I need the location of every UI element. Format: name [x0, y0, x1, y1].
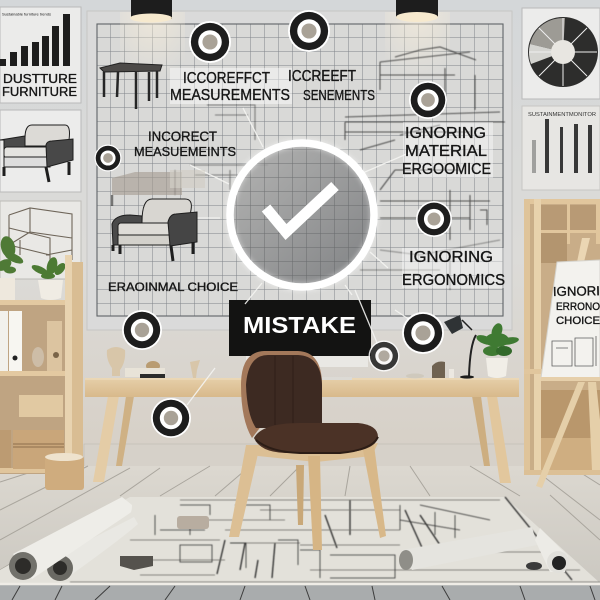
- armchair sketch faded: [112, 170, 205, 206]
- central check badge: [230, 143, 374, 287]
- wall background: [0, 0, 600, 470]
- chair: seat cushion: [254, 423, 378, 453]
- label: ergonomical choice: ERAOINMAL CHOICE: [108, 280, 238, 294]
- light: left pendant: [130, 0, 172, 22]
- poster: armchair: [0, 110, 81, 192]
- badge: ignoring ergonomics: [416, 201, 452, 237]
- floor: [0, 466, 600, 600]
- poster: bar chart with furniture title: FURNITURE: [2, 84, 77, 99]
- label: ignoring material: MATERIAL: [405, 143, 487, 160]
- ceiling lights: [130, 0, 438, 22]
- blueprint roll right: [399, 527, 569, 573]
- label: ignoring material: [402, 122, 493, 178]
- monitor: [229, 300, 371, 380]
- binders: [0, 311, 62, 371]
- label: incorrect measurements 2: SENEMENTS: [303, 87, 375, 104]
- board: ceiling light glow: [120, 12, 185, 102]
- poster header line: Sustainable furniture trends: [2, 12, 51, 16]
- badge: top center: [288, 10, 330, 52]
- blueprint rolls left: [9, 497, 138, 581]
- label: incorrect measurements 2: ICCREEFT: [288, 68, 356, 85]
- badge: ignoring material: [409, 81, 447, 119]
- desk objects right: [406, 362, 454, 378]
- poster: wireframe sofa: [0, 201, 81, 279]
- boxes: [0, 395, 64, 469]
- poster: bar chart right: [522, 106, 600, 190]
- chair: wooden frame: [246, 443, 378, 462]
- badge: below board left: [122, 310, 162, 350]
- label: ignoring ergonomics: IGNORING: [409, 249, 493, 266]
- wooden stool cylinder: [45, 453, 84, 490]
- main grid board: [87, 11, 512, 330]
- shelf: right with boxes: [524, 199, 600, 475]
- label: ignoring ergonomics: ERGONOMICS: [402, 272, 505, 289]
- leader lines: [187, 108, 416, 405]
- potted plant on desk: [475, 322, 519, 378]
- poster: bar chart with furniture title: [0, 7, 81, 103]
- chair: rear leg: [296, 465, 304, 525]
- easel with chart: CHOICE: [556, 315, 600, 327]
- board: architectural sketches: [175, 47, 505, 290]
- badge: below board right: [402, 312, 444, 354]
- label: incorrect measurements 1: MEASUREMENTS: [170, 87, 290, 104]
- label: incorrect measurements 3: INCORECT: [148, 128, 217, 144]
- light: right pendant: [396, 0, 438, 22]
- label: incorrect measurements 3: [134, 128, 236, 159]
- monitor label: MISTAKE: [243, 312, 356, 338]
- check mark: [266, 186, 335, 232]
- desk objects left: [107, 347, 200, 378]
- baseboard: [84, 444, 534, 468]
- label: incorrect measurements 2: [288, 68, 375, 104]
- desk: [85, 378, 519, 483]
- poster title: DUSTTURE: [3, 71, 77, 86]
- chair: [229, 351, 386, 550]
- badge: incorrect measurements small: [94, 144, 122, 172]
- poster: pie chart: [522, 8, 600, 99]
- poster header line: SUSTAINMENTMONITOR: [528, 112, 596, 118]
- label: incorrect measurements 1: ICCOREFFCT: [183, 70, 270, 87]
- easel drawing: [552, 336, 596, 366]
- badge: near monitor: [368, 340, 400, 372]
- label: incorrect measurements 3: MEASUEMEINTS: [134, 144, 236, 159]
- chair: backrest: [241, 351, 322, 438]
- label: ignoring material: IGNORING: [405, 125, 486, 142]
- tape measure objects on rug: [120, 516, 209, 570]
- easel text: IGNORI: [553, 283, 600, 299]
- blueprint rug: [0, 497, 600, 600]
- label: incorrect measurements 1: [170, 68, 292, 104]
- left plants: [0, 235, 68, 300]
- armchair on board: [112, 199, 197, 261]
- label: ignoring ergonomics: [402, 248, 505, 289]
- label: ignoring material: ERGOOMICE: [402, 161, 491, 178]
- badge: top left: [189, 21, 231, 63]
- badge: below desk: [151, 398, 191, 438]
- easel with chart: [536, 238, 600, 488]
- shelf: left with binders and boxes: [0, 235, 83, 474]
- table sketch: [100, 63, 162, 109]
- desk lamp: [444, 315, 476, 379]
